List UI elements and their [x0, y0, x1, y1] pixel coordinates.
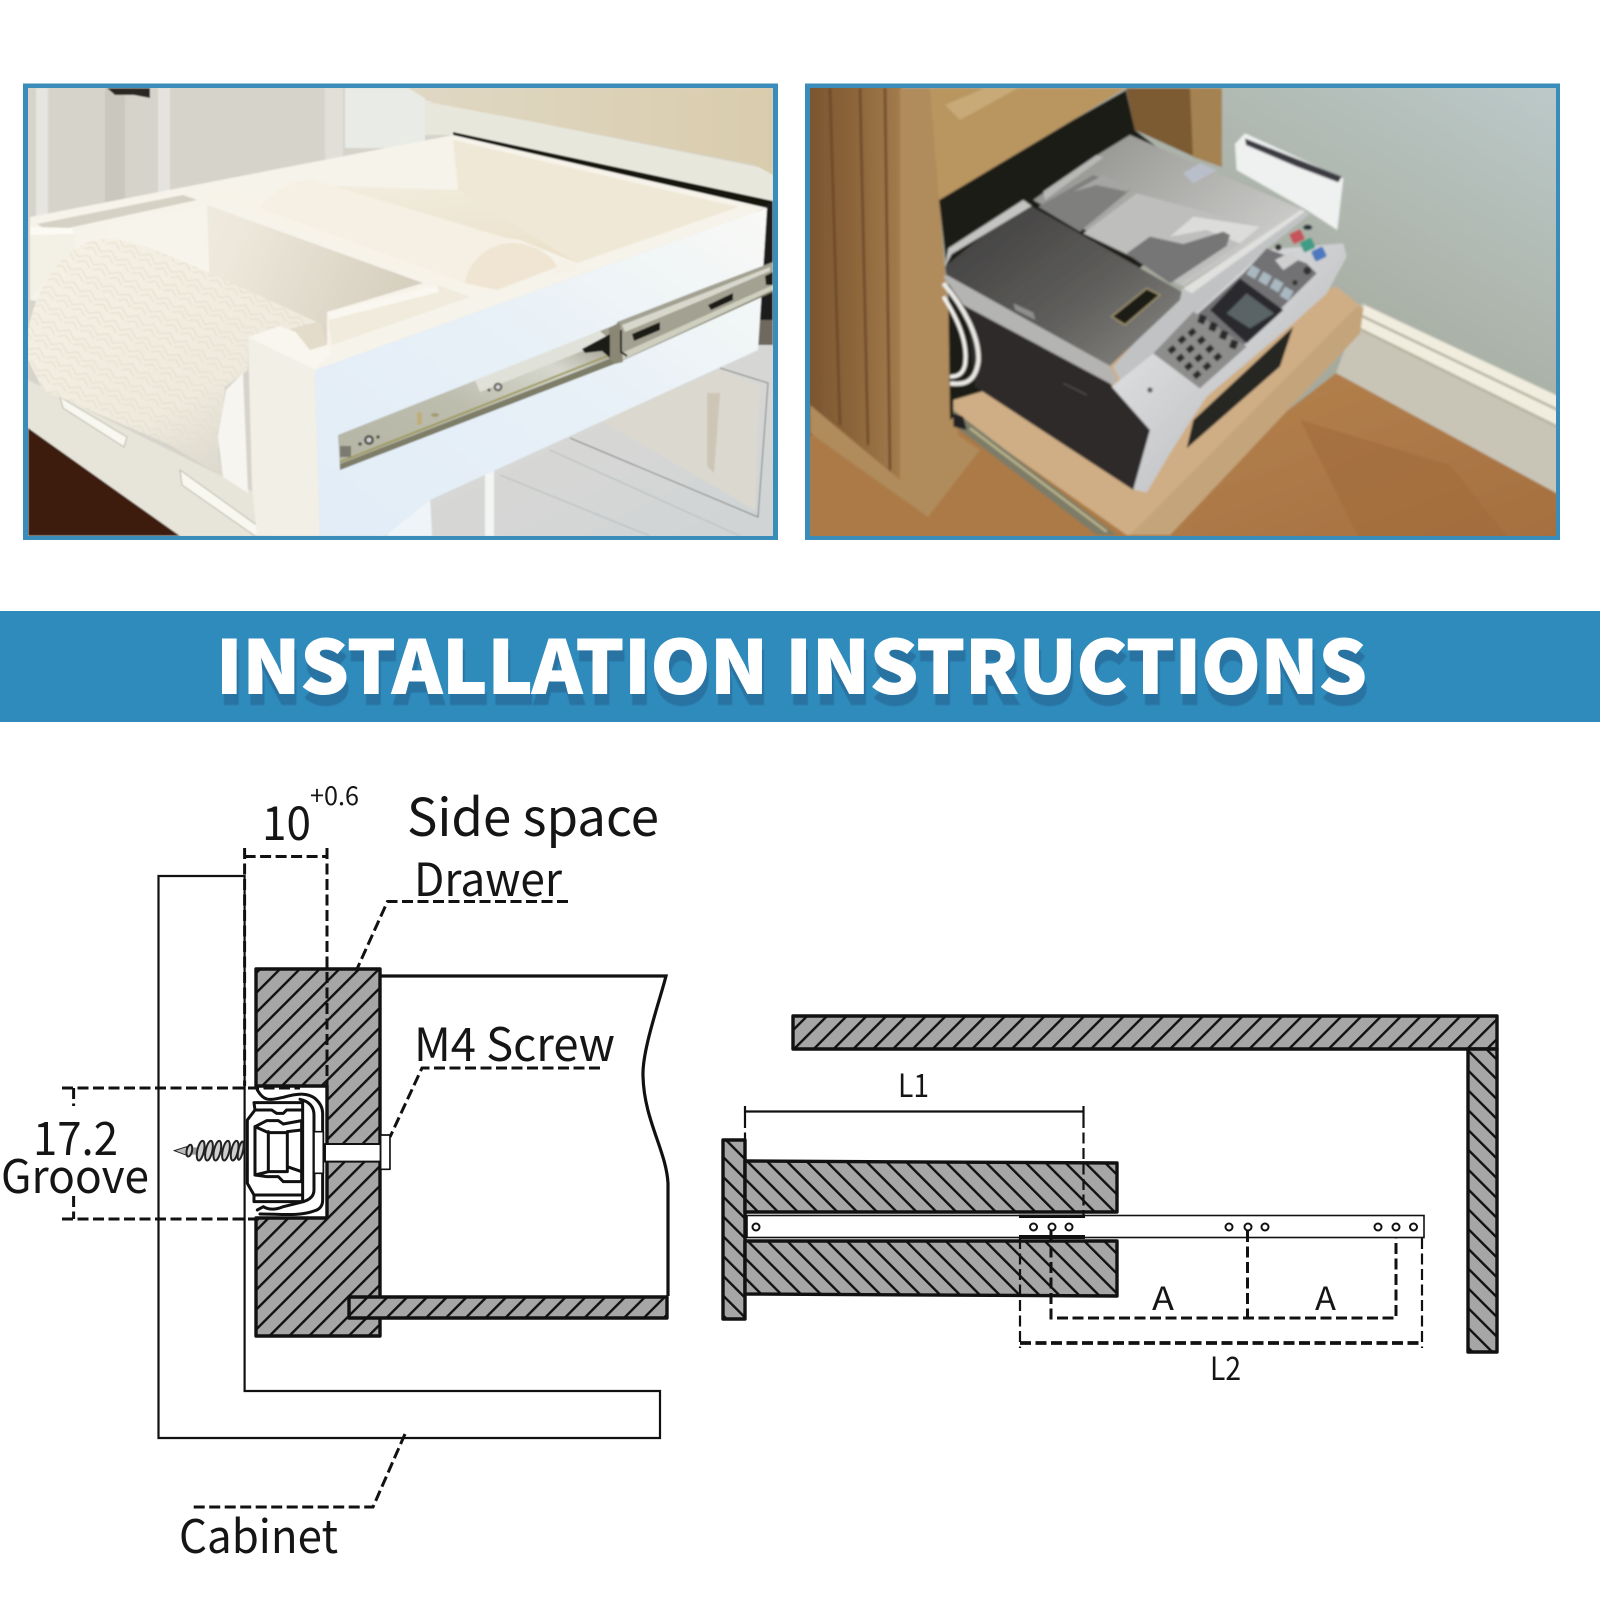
- dimension: side space width: [245, 848, 327, 1086]
- dimension A: [1051, 1231, 1396, 1318]
- lower-left cabinet: [28, 380, 275, 536]
- label: cabinet: Cabinet: [179, 1501, 338, 1567]
- side panel: [315, 208, 767, 536]
- scanner top: [1033, 135, 1303, 287]
- side section diagram: [1, 776, 668, 1567]
- slide rail with mounting holes: [747, 1214, 1424, 1239]
- left end block: [30, 227, 75, 300]
- upper wood: [930, 88, 1126, 200]
- photo panel: printer on pull-out shelf: [800, 80, 1565, 545]
- control panel: [1196, 248, 1318, 346]
- title: installation instructions: INSTALLATION INSTRUCTIONS: [216, 610, 1367, 716]
- shelf: [953, 287, 1363, 535]
- lower drawer side hatched: [745, 1241, 1117, 1296]
- middle compartment: [208, 206, 422, 343]
- silver chassis: [1112, 243, 1347, 493]
- rear slot: [37, 195, 197, 232]
- label: 10: 10: [262, 785, 311, 854]
- label: L2: L2: [1210, 1344, 1241, 1390]
- dark interior: [938, 89, 1156, 420]
- cable: [943, 283, 978, 384]
- label: 17.2: 17.2: [33, 1103, 118, 1169]
- paper: [1235, 133, 1343, 230]
- roll 2: [324, 200, 498, 236]
- floor: [1181, 372, 1556, 536]
- label: +0.6: +0.6: [310, 776, 359, 813]
- front end grain: [248, 337, 320, 536]
- label: drawer: Drawer: [414, 844, 562, 910]
- upper drawer side hatched: [745, 1161, 1117, 1212]
- dimension L1: [745, 1106, 1084, 1216]
- cabinet side: [810, 413, 812, 436]
- drawer bottom panel hatched: [349, 1297, 667, 1318]
- silver strip: [1113, 210, 1310, 380]
- drawer slide rail cross-section: [247, 1090, 390, 1215]
- leader: drawer: [357, 902, 568, 969]
- drawer side wall hatched: [256, 969, 380, 1336]
- cabinet right wall hatched: [1468, 1049, 1497, 1352]
- icon: wood screw: [174, 1140, 245, 1161]
- label: A left: A: [1152, 1274, 1175, 1320]
- small compartment: [327, 285, 470, 345]
- roll 1: [28, 239, 317, 477]
- front section diagram: [723, 1016, 1497, 1390]
- baseboard: [1336, 303, 1560, 495]
- cabinet top board hatched: [793, 1016, 1497, 1049]
- drawer profile outline: [380, 976, 668, 1296]
- label: A right: A: [1315, 1274, 1337, 1320]
- rail: [337, 326, 612, 468]
- drawer top rim: [30, 135, 767, 370]
- divider: [198, 188, 500, 293]
- leader: cabinet: [191, 1434, 405, 1507]
- label: side space: Side space: [407, 776, 659, 851]
- photo panel: paper towel drawer on slides: [20, 80, 785, 545]
- large compartment: [338, 186, 574, 262]
- cabinet outline: [158, 876, 660, 1438]
- right dark: [1187, 327, 1293, 448]
- lower-right cabinet: [431, 344, 773, 536]
- dimension L2: [1020, 1238, 1422, 1348]
- leader: M4 screw: [390, 1068, 600, 1137]
- printer body: [967, 307, 1152, 490]
- label: groove: Groove: [1, 1141, 149, 1207]
- banner background: [0, 611, 1600, 722]
- label: L1: L1: [898, 1061, 929, 1107]
- drawer front panel hatched: [723, 1140, 745, 1319]
- dimension: groove height: [62, 1088, 300, 1219]
- label: M4 screw: M4 Screw: [414, 1009, 615, 1075]
- lid: [945, 202, 1182, 366]
